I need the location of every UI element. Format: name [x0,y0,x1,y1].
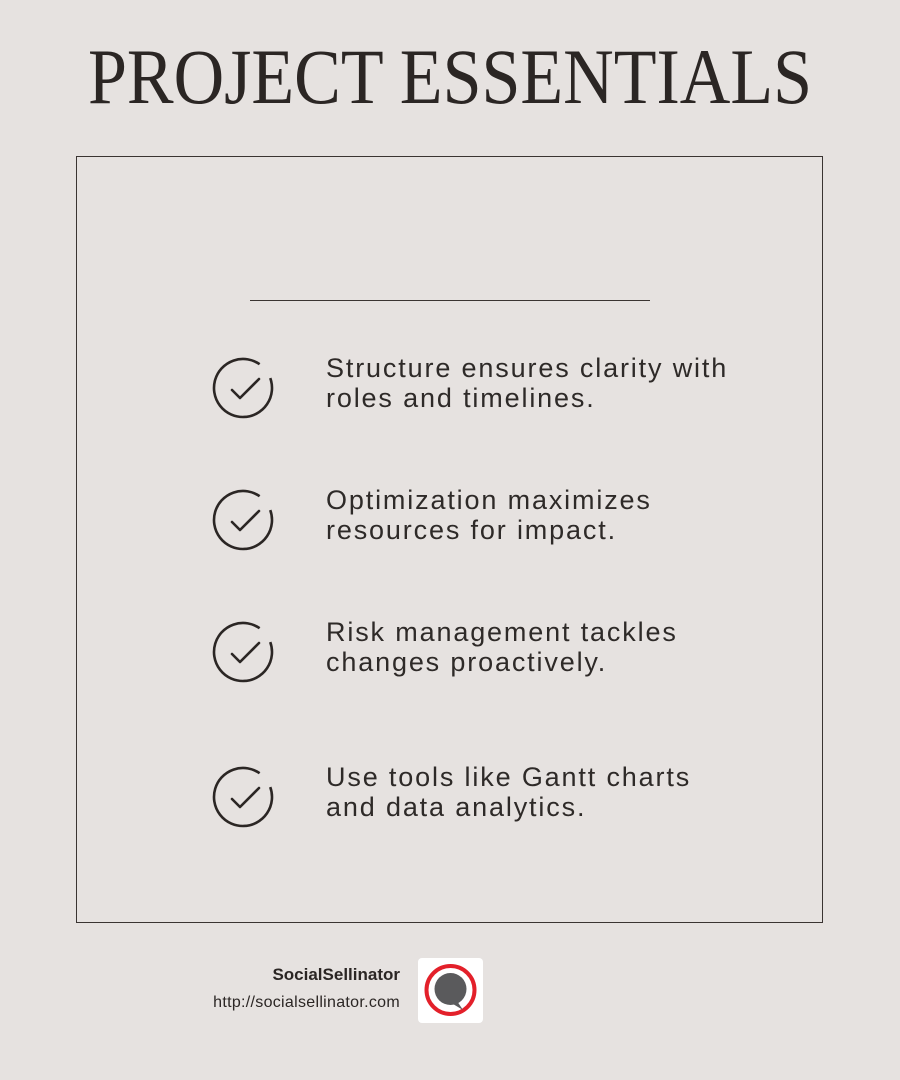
text [326,485,652,545]
text [326,353,728,413]
text: and data analytics. [326,792,586,822]
footer brand [213,965,400,1011]
panel: essentials box [76,156,823,923]
text: Risk management tackles [326,617,678,647]
icon: check circle [212,622,274,682]
text: Structure ensures clarity with [326,353,728,383]
text: roles and timelines. [326,383,596,413]
item 3 [212,617,678,682]
icon: check circle [212,766,274,828]
item 4 [212,762,691,828]
icon: check circle [212,490,274,550]
item 1 [212,353,728,418]
text: Use tools like Gantt charts [326,762,691,792]
divider line [250,300,650,301]
text: Optimization maximizes [326,485,652,515]
text [326,762,691,822]
url: http://socialsellinator.com [213,994,400,1011]
icon: check circle [212,358,274,418]
text: resources for impact. [326,515,617,545]
title: PROJECT ESSENTIALS [88,33,812,120]
text [326,617,678,677]
brand name: SocialSellinator [272,965,400,984]
item 2 [212,485,652,550]
logo [418,958,483,1023]
text: changes proactively. [326,647,607,677]
